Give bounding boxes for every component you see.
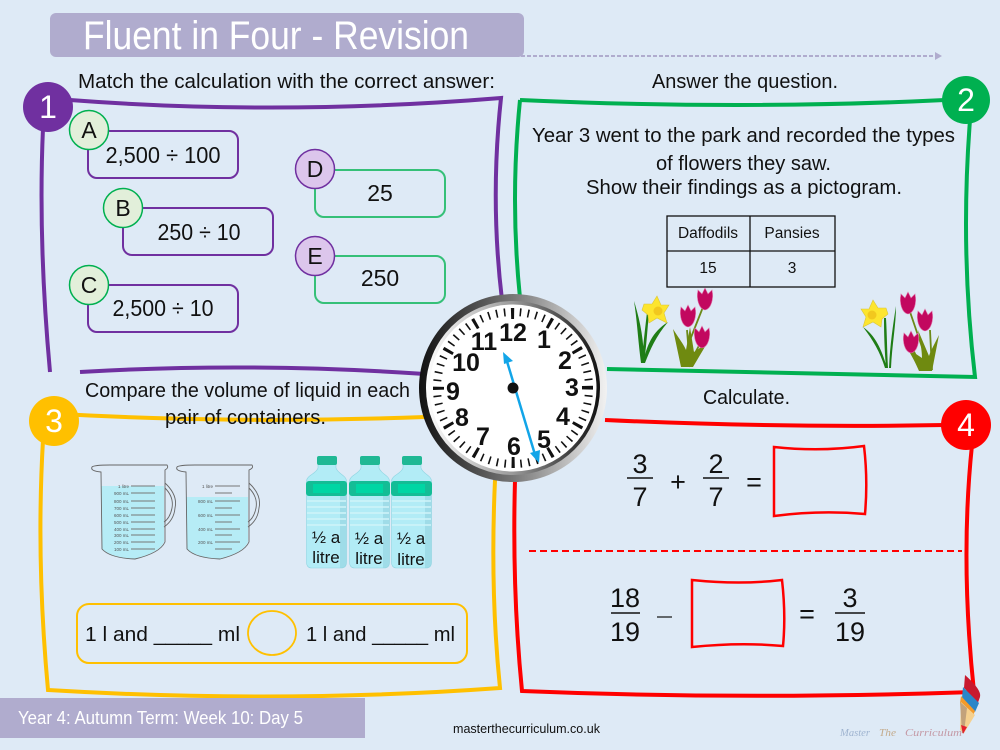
subtraction sum: 19 <box>835 617 865 647</box>
addition sum: 7 <box>632 482 648 512</box>
icon: beaker left: 700 mL <box>114 506 129 511</box>
box B <box>104 188 273 255</box>
icon: bottles: ½ a <box>397 529 426 548</box>
logo text: Master <box>839 727 871 739</box>
logo text <box>839 727 962 739</box>
badge 2 <box>942 76 990 124</box>
data table: Daffodils <box>678 225 738 242</box>
icon: beaker right <box>177 465 260 559</box>
icon: beaker left: 100 mL <box>114 547 129 552</box>
dashed divider <box>529 550 962 552</box>
icon: beaker left: 600 mL <box>114 513 129 518</box>
data table: Pansies <box>764 225 820 242</box>
box A <box>70 110 238 178</box>
box C <box>70 266 238 332</box>
clock numbers: 4 <box>556 403 570 431</box>
clock numbers: 11 <box>471 328 497 356</box>
panel outline <box>514 420 974 696</box>
minute ticks <box>437 312 589 464</box>
heading: Match the calculation with the correct answer: <box>78 71 495 93</box>
clock numbers: 7 <box>476 423 490 451</box>
addition sum: = <box>746 467 762 497</box>
icon: bottles: litre <box>312 548 340 567</box>
icon: beaker left: 1 litre <box>118 484 129 489</box>
icon: beaker left <box>92 465 176 559</box>
badge 4 <box>941 400 991 450</box>
answer box: 1 l and _____ ml <box>306 624 455 646</box>
subtraction sum: 19 <box>610 617 640 647</box>
title: Fluent in Four - Revision <box>83 14 469 58</box>
box E: 250 <box>361 265 399 291</box>
icon: beaker right: 1 litre <box>202 484 213 489</box>
badge 4: 4 <box>957 407 975 443</box>
clock numbers: 2 <box>558 347 572 375</box>
box C: C <box>81 272 97 298</box>
box A: 2,500 ÷ 100 <box>106 142 220 168</box>
arrow: title rule <box>467 52 942 60</box>
clock <box>419 294 607 482</box>
icon: beaker left: 200 mL <box>114 540 129 545</box>
panel 3: compare volumes <box>29 380 500 697</box>
icon: beaker right: 600 mL <box>198 513 213 518</box>
hour ticks <box>438 314 588 462</box>
badge 1: 1 <box>39 89 57 125</box>
addition sum: + <box>670 467 686 497</box>
question text: Show their findings as a pictogram. <box>586 177 902 199</box>
box B: B <box>115 195 131 221</box>
heading: Compare the volume of liquid in each <box>85 380 410 402</box>
question text <box>532 125 955 199</box>
panel outline <box>40 414 500 697</box>
icon: beaker left: 800 mL <box>114 499 129 504</box>
clock numbers: 8 <box>455 404 469 432</box>
addition sum: 2 <box>708 449 724 479</box>
icon: beaker left: 400 mL <box>114 527 129 532</box>
badge 2: 2 <box>957 82 975 118</box>
data table <box>667 216 835 287</box>
clock numbers: 5 <box>537 426 551 454</box>
addition sum: 3 <box>632 449 648 479</box>
icon: bottles: ½ a <box>355 529 384 548</box>
data table: 3 <box>788 260 796 277</box>
clock numbers: 12 <box>499 319 527 347</box>
website: masterthecurriculum.co.uk <box>453 721 600 736</box>
subtraction sum <box>610 580 865 647</box>
addition sum: 7 <box>708 482 724 512</box>
icon: flowers right <box>861 292 939 371</box>
logo text: The <box>879 727 896 739</box>
badge 1 <box>23 82 73 132</box>
box D <box>296 150 445 217</box>
clock hands <box>503 352 540 463</box>
clock numbers: 1 <box>537 326 551 354</box>
box A: A <box>81 117 97 143</box>
data table: 15 <box>699 260 717 277</box>
icon: beaker right: 800 mL <box>198 499 213 504</box>
panel outline <box>42 98 502 374</box>
icon: bottles: litre <box>355 549 383 568</box>
clock bezel <box>419 294 607 482</box>
panel 2: pictogram <box>515 71 990 377</box>
icon: beaker right: 400 mL <box>198 527 213 532</box>
icon: beaker left: 300 mL <box>114 533 129 538</box>
heading: pair of containers. <box>165 407 326 429</box>
box B: 250 ÷ 10 <box>158 219 240 245</box>
subtraction sum: = <box>799 599 815 629</box>
question text: of flowers they saw. <box>656 153 831 175</box>
clock numbers: 6 <box>507 433 521 461</box>
subtraction sum: 18 <box>610 583 640 613</box>
icon: flowers left <box>634 288 713 367</box>
footer bar <box>0 698 365 738</box>
box D: 25 <box>367 180 393 206</box>
addition sum <box>627 446 866 516</box>
subtraction sum: 3 <box>842 583 858 613</box>
panel 1: match the calculation <box>23 71 502 374</box>
icon: bottles: litre <box>397 550 425 569</box>
clock numbers: 9 <box>446 378 460 406</box>
answer box: 1 l and _____ ml <box>85 624 240 646</box>
heading <box>85 380 410 429</box>
footer bar: Year 4: Autumn Term: Week 10: Day 5 <box>18 708 303 728</box>
icon: bottles <box>306 456 432 569</box>
heading: Calculate. <box>703 387 790 409</box>
question text: Year 3 went to the park and recorded the types <box>532 125 955 147</box>
clock numbers: 10 <box>452 349 480 377</box>
logo: pencil <box>960 675 980 734</box>
box D: D <box>307 156 323 182</box>
box C: 2,500 ÷ 10 <box>112 295 214 321</box>
icon: bottles: ½ a <box>312 528 341 547</box>
panel 4: fractions <box>514 387 991 696</box>
logo text: Curriculum <box>905 727 962 739</box>
icon: beaker left: 900 mL <box>114 491 129 496</box>
heading: Answer the question. <box>652 71 838 93</box>
icon: beaker left: 500 mL <box>114 520 129 525</box>
panel outline <box>515 100 975 377</box>
badge 3 <box>29 396 79 446</box>
box E <box>296 236 445 303</box>
answer box <box>77 604 467 663</box>
icon: beaker right: 200 mL <box>198 540 213 545</box>
clock numbers <box>446 319 579 461</box>
clock numbers: 3 <box>565 374 579 402</box>
badge 3: 3 <box>45 403 63 439</box>
box E: E <box>307 243 323 269</box>
